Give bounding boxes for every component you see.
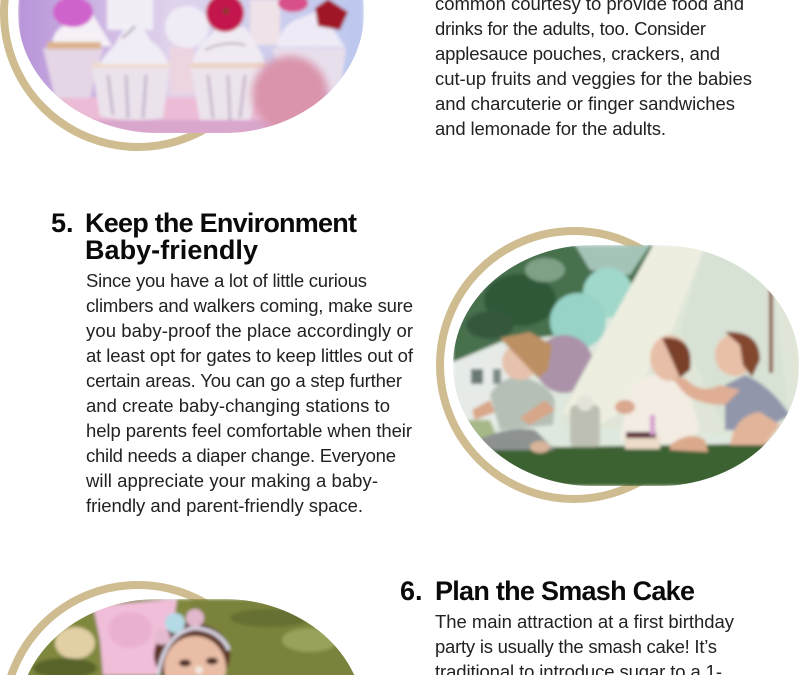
photo: babies by teepee on the grass (453, 245, 800, 486)
heading: section 5: Keep the Environment (85, 208, 357, 238)
text: section 5 body: and create baby-changing stations to (86, 395, 390, 416)
heading: section 6: Plan the Smash Cake (435, 576, 695, 606)
house (454, 347, 506, 424)
balloons (583, 268, 633, 318)
pink tutu (93, 599, 177, 675)
text: section 6 body (435, 611, 735, 675)
heading: section 5: 5. (51, 208, 74, 238)
text: section 4 body (435, 0, 752, 139)
cup C (190, 65, 267, 120)
text: section 5 body: Since you have a lot of little curious (86, 270, 367, 291)
ring: cupcake photo frame (4, 0, 272, 147)
left cup (43, 48, 103, 98)
hair (154, 623, 230, 675)
pink flower (53, 0, 93, 27)
baby 3 (725, 375, 790, 432)
cake (625, 437, 660, 449)
crimson flower (206, 0, 244, 32)
cup B (92, 65, 170, 120)
photo: cupcakes on pink stand (18, 0, 364, 137)
text: section 5 body: child needs a diaper change. Everyone (86, 445, 396, 466)
trees (453, 245, 655, 362)
heading: section 6: 6. (400, 576, 423, 606)
photo: baby with floral headband (18, 599, 364, 675)
grass (488, 442, 768, 486)
red flower (315, 0, 348, 30)
ring: cake-smash photo frame (4, 585, 272, 675)
text: section 5 body: climbers and walkers coming, make sure (86, 295, 413, 316)
right cup (272, 48, 346, 92)
heading: section 5 (51, 208, 357, 265)
text: section 5 body (85, 270, 414, 516)
text: section 4 body: and charcuterie or finger sandwiches (435, 93, 735, 114)
text: section 4 body: drinks for the adults, too. Consider (435, 18, 706, 39)
text: section 5 body: at least opt for gates to keep littles out of (86, 345, 414, 366)
text: section 4 body: cut-up fruits and veggies for the babies (435, 68, 752, 89)
text: section 6 body: party is usually the smash cake! It’s (435, 636, 717, 657)
plate (58, 96, 322, 133)
lantern (570, 405, 600, 447)
heading: section 5: Baby-friendly (85, 235, 258, 265)
text: section 5 body: you baby-proof the place accordingly or (86, 320, 413, 341)
text: section 4 body: applesauce pouches, crackers, and (435, 43, 720, 64)
ring: babies photo frame (440, 231, 708, 499)
text: section 5 body: will appreciate your making a baby- (85, 470, 378, 491)
face (164, 636, 226, 675)
teepee (572, 266, 799, 392)
text: section 5 body: help parents feel comfortable when their (86, 420, 412, 441)
back cup middle (170, 47, 194, 94)
pink ball (252, 56, 328, 132)
headband (158, 628, 229, 675)
text: section 5 body: friendly and parent-friendly space. (86, 495, 363, 516)
text: section 5 body: certain areas. You can go a step further (86, 370, 402, 391)
text: section 6 body: The main attraction at a first birthday (435, 611, 735, 632)
baby 2 (620, 375, 700, 445)
eyes (179, 660, 191, 666)
baby 1 (490, 376, 555, 430)
text: section 4 body: and lemonade for the adults. (435, 118, 666, 139)
